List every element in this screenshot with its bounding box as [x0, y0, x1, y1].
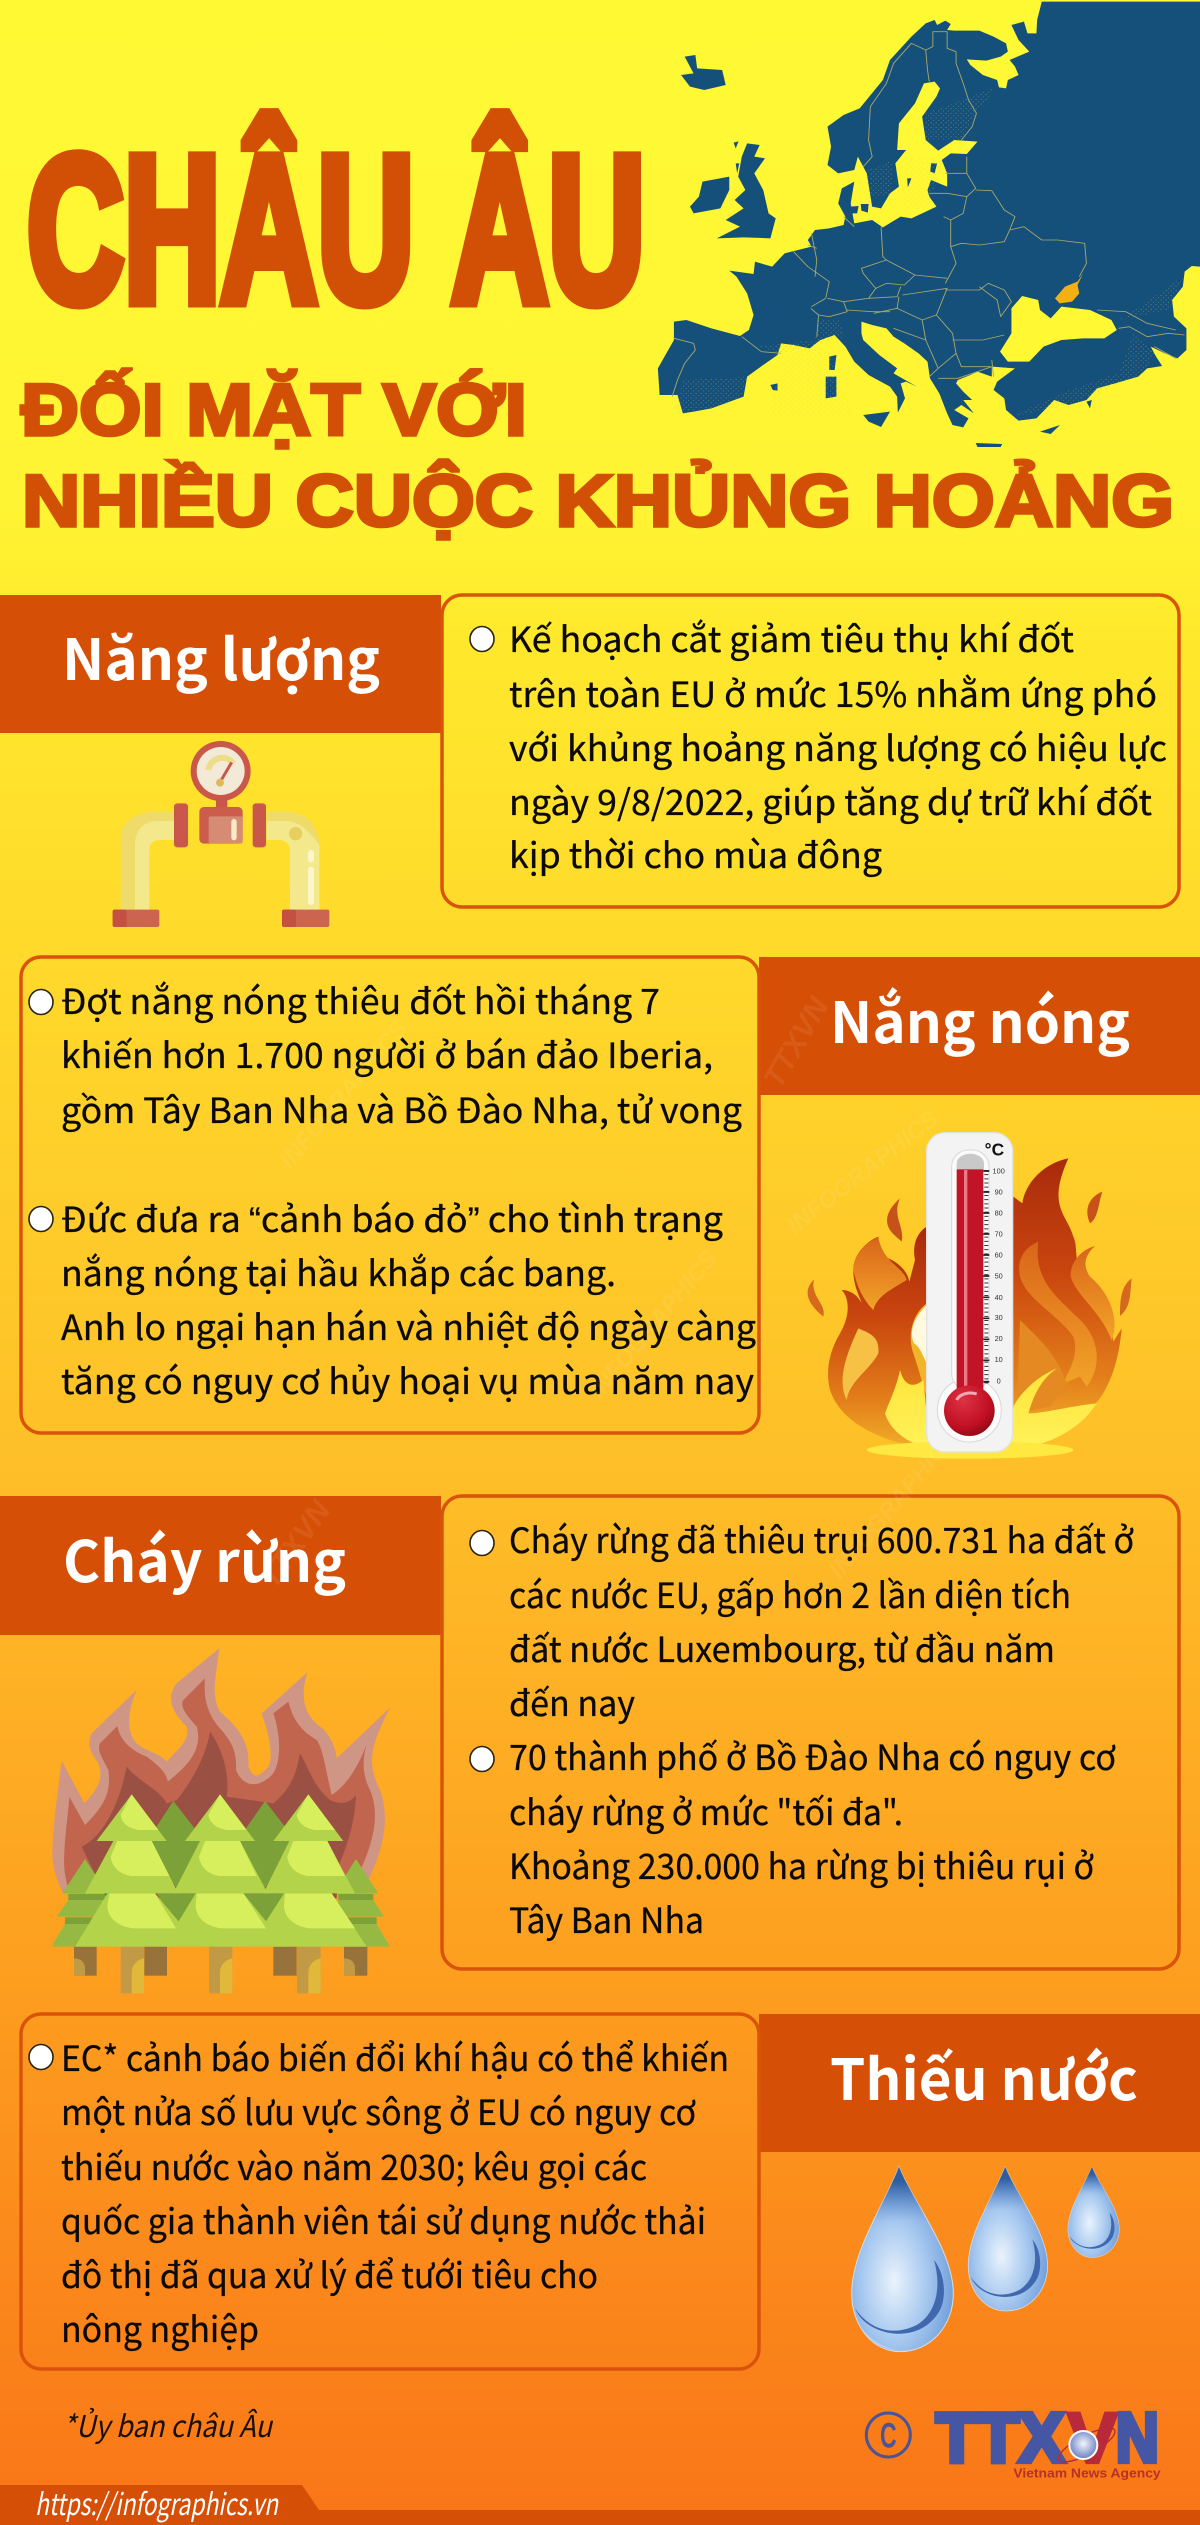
heat wave header bar	[759, 957, 1200, 1095]
logo: TTXVN: TTX	[936, 2399, 1064, 2477]
heat wave text: Anh lo ngại hạn hán và nhiệt độ ngày càng	[61, 1300, 756, 1351]
faint watermarks: TTXVN	[254, 1493, 338, 1594]
logo: TTXVN: C	[880, 2416, 897, 2455]
water shortage text: đô thị đã qua xử lý để tưới tiêu cho	[61, 2248, 598, 2299]
energy bullet	[470, 626, 494, 652]
energy text box	[442, 595, 1179, 907]
panel: heat wave	[21, 957, 1200, 1433]
icon: burning forest	[52, 1648, 390, 1993]
water shortage text: thiếu nước vào năm 2030; kêu gọi các	[61, 2140, 647, 2191]
title: CHÂU ÂU: CHÂU ÂU	[27, 114, 645, 346]
water shortage text: nông nghiệp	[61, 2302, 259, 2353]
water shortage text box	[21, 2014, 759, 2369]
wildfire text: các nước EU, gấp hơn 2 lần diện tích	[509, 1568, 1071, 1619]
icon: thermometer in flames: 50	[995, 1272, 1003, 1281]
icon: thermometer in flames: 60	[995, 1251, 1003, 1260]
energy text: Kế hoạch cắt giảm tiêu thụ khí đốt	[509, 612, 1074, 663]
water shortage text: EC* cảnh báo biến đổi khí hậu có thể khiến	[61, 2031, 729, 2082]
energy heading: Năng lượng	[62, 615, 380, 697]
wildfire text: Tây Ban Nha	[509, 1893, 704, 1944]
icon: water drops	[852, 2167, 1119, 2352]
wildfire text: đến nay	[509, 1676, 635, 1727]
website footer bar: https://infographics.vn	[35, 2480, 279, 2524]
water shortage text: một nửa số lưu vực sông ở EU có nguy cơ	[61, 2085, 696, 2136]
logo: TTXVN	[866, 2399, 1161, 2480]
wildfire bullets	[470, 1530, 494, 1772]
energy text: ngày 9/8/2022, giúp tăng dự trữ khí đốt	[509, 775, 1152, 826]
panel: wildfire	[0, 1496, 1179, 1969]
heat wave text	[61, 974, 756, 1405]
panel: energy	[0, 595, 1179, 907]
wildfire text: Khoảng 230.000 ha rừng bị thiêu rụi ở	[509, 1839, 1094, 1890]
faint watermarks	[254, 991, 963, 1594]
wildfire text: 70 thành phố ở Bồ Đào Nha có nguy cơ	[509, 1730, 1116, 1781]
islands	[681, 55, 1092, 447]
wildfire text	[509, 1513, 1134, 1944]
faint watermarks: INFOGRAPHICS	[274, 1016, 413, 1174]
footnote: *Ủy ban châu Âu	[63, 2402, 274, 2446]
faint watermarks: INFOGRAPHICS	[782, 1105, 944, 1240]
icon: thermometer in flames: 80	[995, 1209, 1003, 1218]
icon: gas pipe with gauge	[113, 741, 329, 927]
seas overlay	[1000, 296, 1117, 362]
energy text: kịp thời cho mùa đông	[509, 828, 882, 879]
heat wave text: gồm Tây Ban Nha và Bồ Đào Nha, tử vong	[61, 1083, 742, 1134]
heat wave text box	[21, 957, 759, 1433]
logo: TTXVN: Vietnam News Agency	[1013, 2466, 1161, 2480]
water shortage text	[61, 2031, 729, 2353]
icon: thermometer in flames: 90	[995, 1188, 1003, 1197]
large drop	[852, 2167, 953, 2352]
wildfire text box	[442, 1496, 1179, 1969]
subtitle line 2: NHIỀU CUỘC KHỦNG HOẢNG	[22, 461, 1174, 542]
energy text	[509, 612, 1167, 879]
stipple texture	[676, 87, 1183, 417]
heat wave heading: Nắng nóng	[830, 978, 1130, 1060]
faint watermarks: INFOGRAPHICS	[584, 1246, 723, 1404]
icon: thermometer in flames: °C	[985, 1139, 1005, 1159]
small drop	[1068, 2167, 1119, 2257]
heat wave bullets	[29, 990, 53, 1232]
medium drop	[968, 2167, 1048, 2311]
heat wave text: Đức đưa ra “cảnh báo đỏ” cho tình trạng	[61, 1192, 723, 1243]
heat wave text: tăng có nguy cơ hủy hoại vụ mùa năm nay	[61, 1354, 754, 1405]
subtitle line 1: ĐỐI MẶT VỚI	[21, 369, 527, 451]
wildfire text: Cháy rừng đã thiêu trụi 600.731 ha đất ở	[509, 1513, 1134, 1564]
faint watermarks: INFOGRAPHICS	[824, 1426, 963, 1584]
wildfire text: đất nước Luxembourg, từ đầu năm	[509, 1622, 1055, 1673]
icon: thermometer in flames: 100	[993, 1167, 1005, 1176]
icon: thermometer in flames: 30	[995, 1313, 1003, 1322]
region highlighted in amber	[1055, 274, 1083, 303]
heat wave text: nắng nóng tại hầu khắp các bang.	[61, 1246, 616, 1297]
icon: thermometer in flames: 0	[997, 1376, 1001, 1385]
country borders	[672, 32, 1185, 397]
icon: thermometer in flames: 40	[995, 1293, 1003, 1302]
icon: thermometer in flames	[808, 1133, 1132, 1459]
energy text: với khủng hoảng năng lượng có hiệu lực	[509, 721, 1167, 772]
panel: water shortage	[21, 2014, 1200, 2369]
logo: TTXVN: V	[1067, 2399, 1118, 2479]
faint watermarks: TTXVN	[757, 991, 836, 1094]
water shortage text: quốc gia thành viên tái sử dụng nước thải	[61, 2194, 706, 2245]
energy header bar	[0, 595, 441, 733]
wildfire header bar	[0, 1496, 441, 1635]
water shortage header bar	[759, 2014, 1200, 2152]
map of Europe	[658, 2, 1200, 447]
icon: thermometer in flames: 10	[995, 1355, 1003, 1364]
energy text: trên toàn EU ở mức 15% nhằm ứng phó	[509, 667, 1157, 718]
logo: TTXVN: N	[1116, 2399, 1159, 2477]
icon: thermometer in flames: 70	[995, 1230, 1003, 1239]
wildfire heading: Cháy rừng	[63, 1517, 346, 1599]
heat wave text: Đợt nắng nóng thiêu đốt hồi tháng 7	[61, 974, 660, 1025]
heat wave text: khiến hơn 1.700 người ở bán đảo Iberia,	[61, 1028, 713, 1079]
website footer bar	[0, 2480, 1200, 2525]
icon: thermometer in flames: 20	[995, 1334, 1003, 1343]
water shortage heading: Thiếu nước	[830, 2035, 1138, 2117]
water shortage bullet	[29, 2044, 53, 2070]
wildfire text: cháy rừng ở mức "tối đa".	[509, 1785, 903, 1836]
